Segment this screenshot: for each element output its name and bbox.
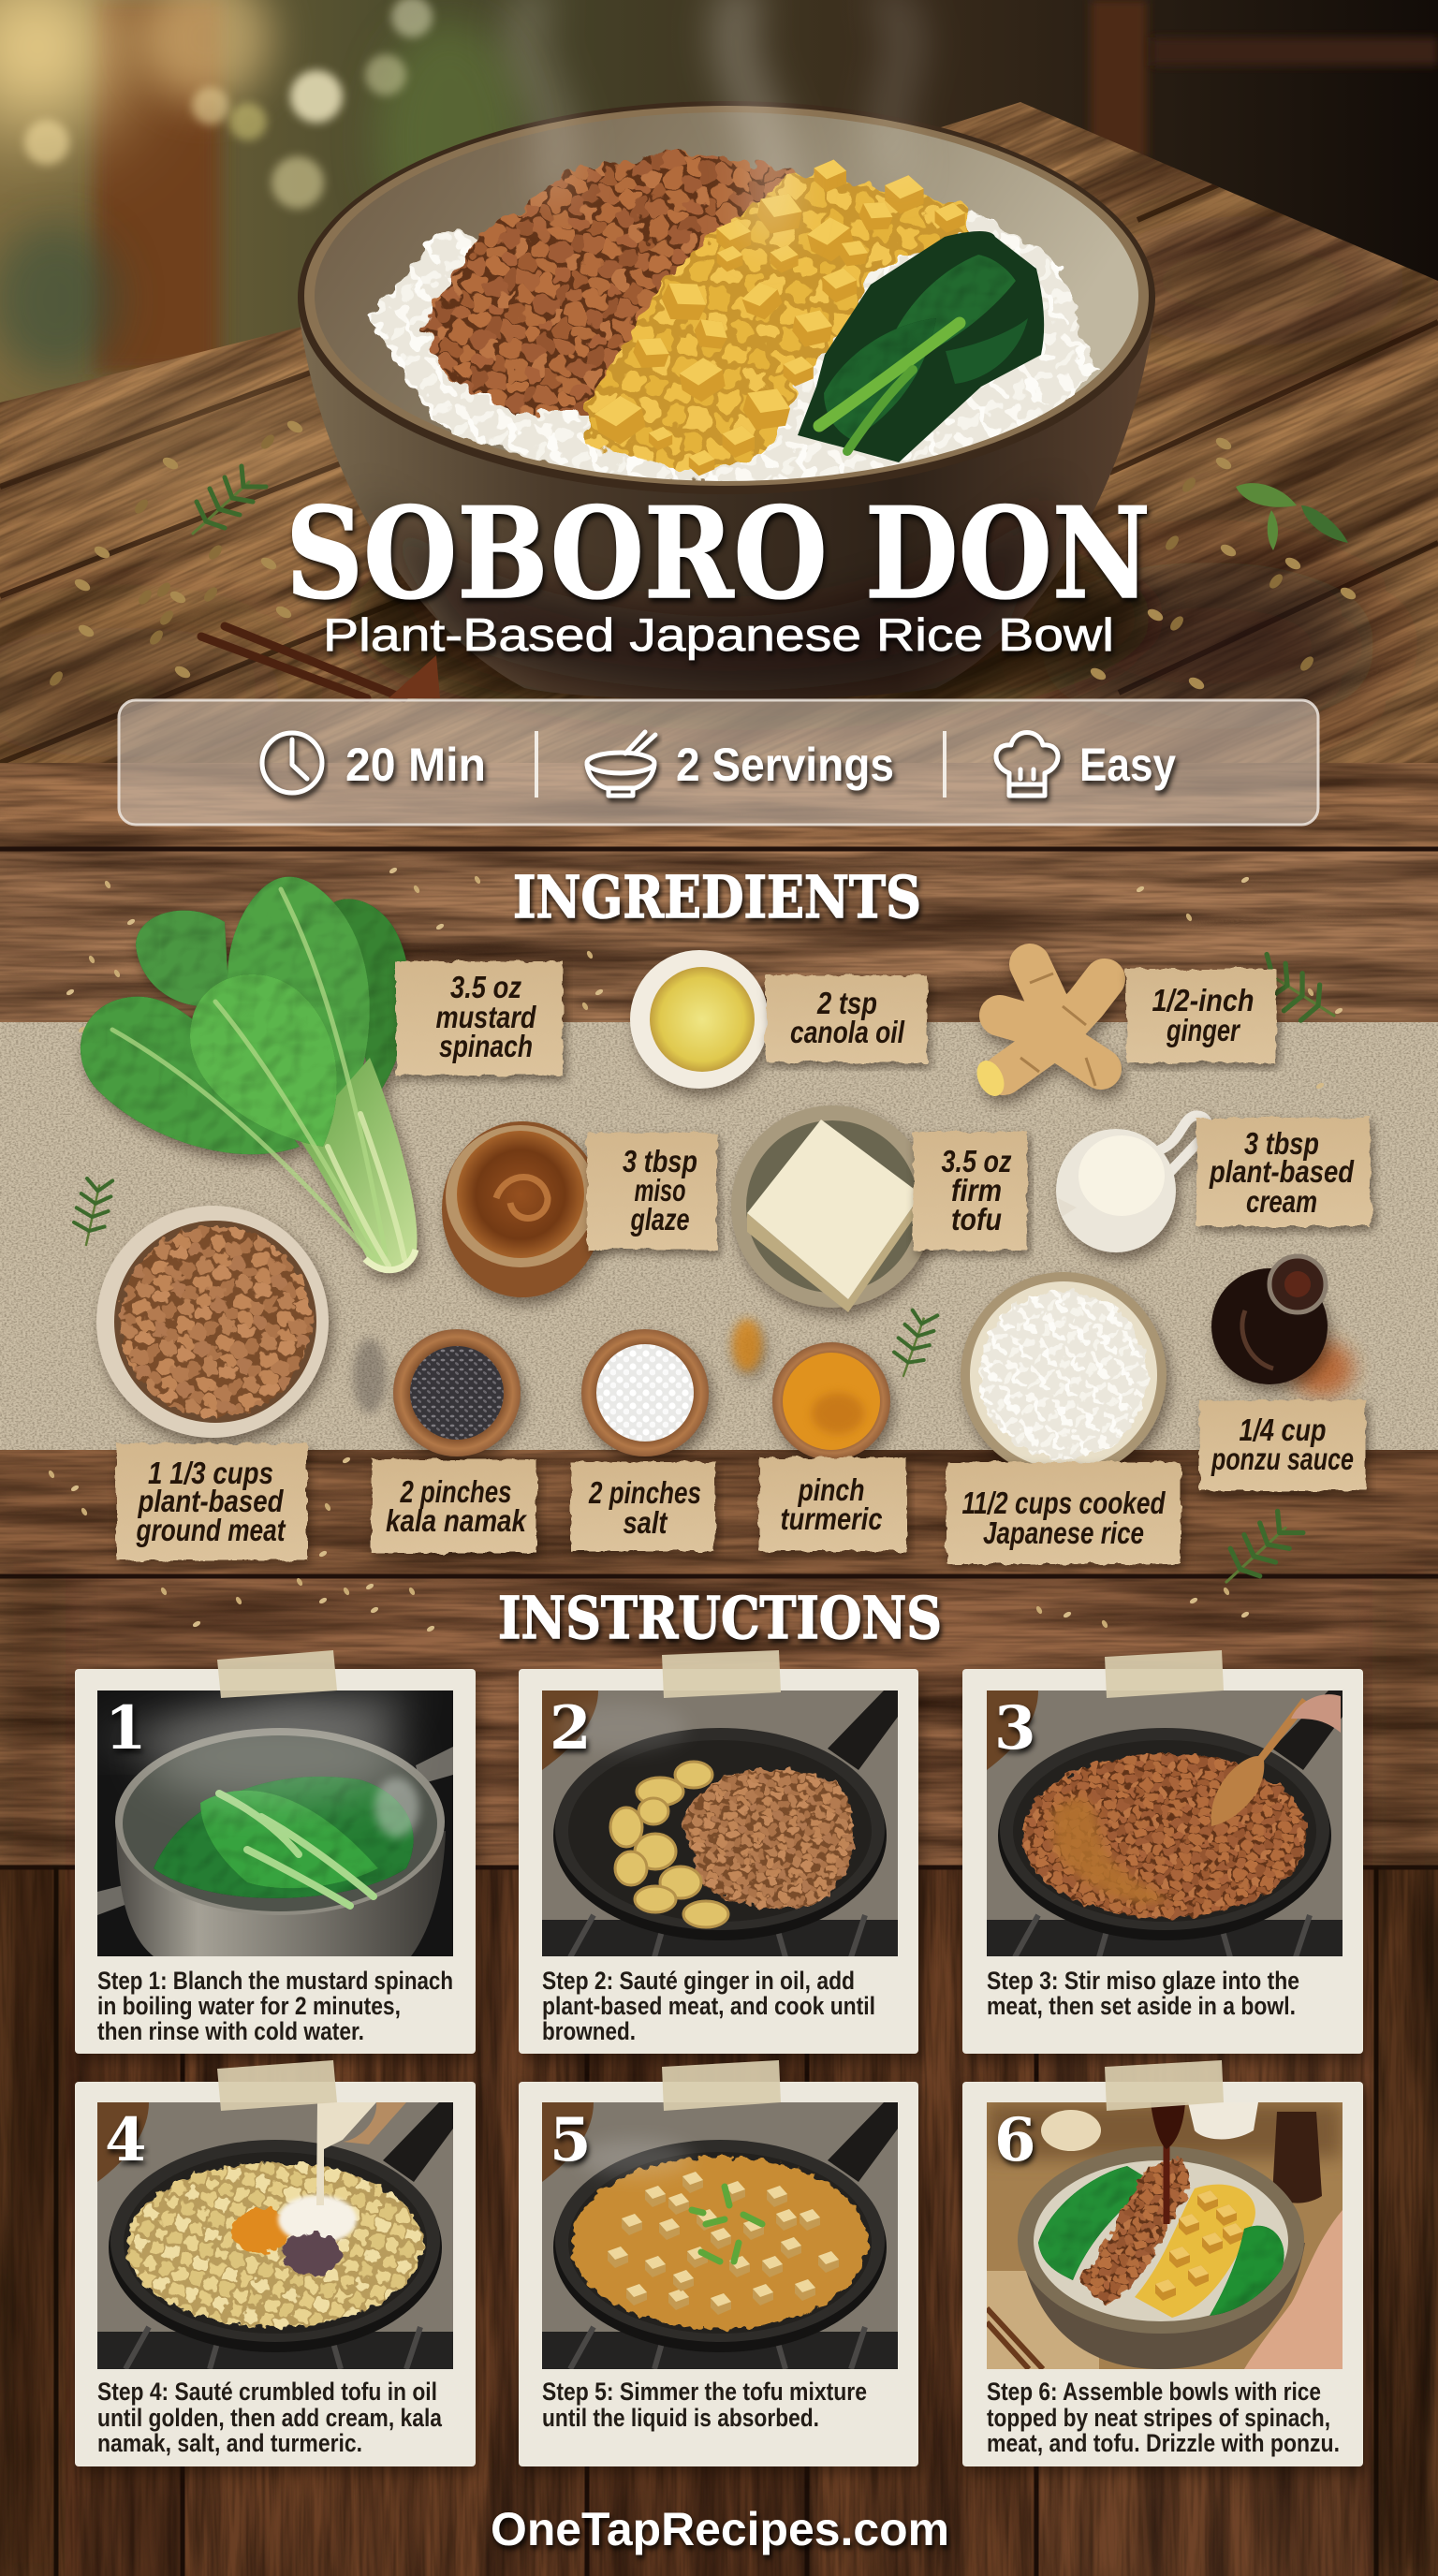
step 5 text: Step 5: Simmer the tofu mixture xyxy=(542,2378,867,2406)
tape xyxy=(662,1650,781,1698)
label: ponzu sauce: 1/4 cup xyxy=(1240,1412,1326,1447)
icon: mustard spinach bunch xyxy=(81,877,418,1270)
label: turmeric xyxy=(759,1457,906,1551)
step number 5: 5 xyxy=(550,2105,592,2175)
tape xyxy=(217,1650,337,1698)
icon: turmeric bowl xyxy=(732,1319,890,1460)
label: salt: 2 pinches xyxy=(588,1475,701,1510)
label: mustard spinach: mustard xyxy=(436,1000,536,1034)
step number 6: 6 xyxy=(994,2105,1036,2175)
label: mustard spinach: spinach xyxy=(439,1029,533,1063)
label: mustard spinach xyxy=(396,961,563,1076)
label: kala namak: 2 pinches xyxy=(400,1474,511,1509)
label: firm tofu: 3.5 oz xyxy=(942,1144,1012,1178)
scattered seeds and herbs xyxy=(47,418,1357,692)
divider xyxy=(943,731,946,798)
icon: rice bowl xyxy=(587,732,655,796)
label: miso glaze xyxy=(587,1133,717,1250)
subtitle: Plant-Based Japanese Rice Bowl xyxy=(323,610,1114,661)
label: firm tofu: tofu xyxy=(951,1202,1002,1237)
step 3 text: Step 3: Stir miso glaze into the xyxy=(987,1967,1299,1995)
label: plant-based ground meat: 1 1/3 cups xyxy=(148,1456,273,1490)
label: plant-based ground meat: plant-based xyxy=(138,1484,284,1518)
step 6 text: topped by neat stripes of spinach, xyxy=(987,2404,1330,2432)
wooden table xyxy=(0,102,1438,763)
icon: cream jug xyxy=(1056,1116,1208,1252)
servings: 2 Servings xyxy=(676,739,894,791)
step number 2: 2 xyxy=(550,1693,592,1764)
step 1 photo: pot of spinach xyxy=(97,1690,453,1956)
label: turmeric: pinch xyxy=(798,1472,865,1507)
tape xyxy=(217,2060,337,2111)
step 1 text: in boiling water for 2 minutes, xyxy=(97,1992,401,2020)
label: ginger xyxy=(1126,969,1276,1062)
icon: clock xyxy=(262,733,322,793)
label: cooked Japanese rice: 11/2 cups cooked xyxy=(962,1486,1166,1520)
icon: kala namak bowl xyxy=(393,1329,521,1456)
step card 2 xyxy=(519,1650,918,2054)
step card 4 xyxy=(75,2060,476,2466)
step number 1: 1 xyxy=(105,1693,147,1764)
rice layer xyxy=(370,211,1095,487)
label: plant-based ground meat: ground meat xyxy=(136,1513,286,1547)
step 6 text: Step 6: Assemble bowls with rice xyxy=(987,2378,1321,2406)
stats bar xyxy=(119,700,1318,825)
scattered seeds xyxy=(48,867,1343,1632)
label: plant-based cream: plant-based xyxy=(1209,1154,1355,1189)
label: ginger: ginger xyxy=(1166,1013,1241,1047)
frosted glass panel xyxy=(119,700,1318,825)
instructions heading: INSTRUCTIONS xyxy=(498,1584,942,1652)
step number 3: 3 xyxy=(994,1693,1036,1764)
step 4 text: until golden, then add cream, kala xyxy=(97,2404,443,2432)
step 5 text xyxy=(542,2378,867,2432)
label: cooked Japanese rice xyxy=(946,1462,1181,1564)
blurred garden background xyxy=(0,0,1438,449)
icon: ground meat bowl xyxy=(96,1206,329,1438)
steam xyxy=(524,0,905,225)
label: plant-based cream: cream xyxy=(1246,1184,1317,1219)
label: firm tofu: firm xyxy=(951,1173,1002,1208)
step card 6 xyxy=(962,2060,1363,2466)
step 2 text xyxy=(542,1967,875,2045)
donburi bowl xyxy=(298,101,1155,730)
label: ginger: 1/2-inch xyxy=(1152,983,1255,1017)
divider xyxy=(535,731,538,798)
instructions section xyxy=(75,1584,1363,2466)
label: salt: salt xyxy=(624,1505,668,1540)
footer website: OneTapRecipes.com xyxy=(491,2503,949,2555)
label: canola oil: canola oil xyxy=(790,1015,905,1049)
icon: ponzu bottle xyxy=(1211,1256,1354,1397)
tape xyxy=(1105,1650,1224,1698)
label: kala namak: kala namak xyxy=(386,1503,527,1538)
step 4 text: Step 4: Sauté crumbled tofu in oil xyxy=(97,2378,437,2406)
label: firm tofu xyxy=(913,1132,1027,1251)
step number 4: 4 xyxy=(105,2105,147,2175)
step 2 text: Step 2: Sauté ginger in oil, add xyxy=(542,1967,855,1995)
step 5 text: until the liquid is absorbed. xyxy=(542,2404,819,2432)
linen runner xyxy=(0,1022,1438,1450)
step 2 text: plant-based meat, and cook until xyxy=(542,1992,875,2020)
step 6 text xyxy=(987,2378,1340,2457)
title: SOBORO DON xyxy=(286,479,1151,627)
spinach xyxy=(798,231,1044,462)
step 1 text: Step 1: Blanch the mustard spinach xyxy=(97,1967,453,1995)
step card 3 xyxy=(962,1650,1363,2054)
step 4 photo: tofu with cream and spices xyxy=(97,2102,453,2369)
label: salt xyxy=(571,1462,715,1551)
icon: ginger root xyxy=(972,964,1105,1101)
step card 5 xyxy=(519,2060,918,2466)
icon: canola oil dish xyxy=(630,950,769,1089)
label: miso glaze: miso xyxy=(635,1173,685,1208)
step 3 text: meat, then set aside in a bowl. xyxy=(987,1992,1296,2020)
step 3 photo: miso glaze stirred into meat xyxy=(987,1690,1343,1957)
icon: salt bowl xyxy=(581,1329,709,1456)
step 4 text xyxy=(97,2378,443,2457)
ingredients section xyxy=(0,863,1438,1632)
difficulty: Easy xyxy=(1079,739,1176,791)
step 4 text: namak, salt, and turmeric. xyxy=(97,2429,362,2457)
label: canola oil xyxy=(766,975,928,1062)
prep time: 20 Min xyxy=(345,739,486,791)
label: turmeric: turmeric xyxy=(781,1501,882,1536)
icon: cooked rice bowl xyxy=(961,1272,1167,1478)
plant-based meat xyxy=(421,151,798,414)
label: plant-based ground meat xyxy=(116,1443,307,1560)
label: miso glaze: glaze xyxy=(630,1202,689,1237)
tape xyxy=(1105,2060,1224,2111)
label: kala namak xyxy=(372,1459,536,1553)
step 6 text: meat, and tofu. Drizzle with ponzu. xyxy=(987,2429,1340,2457)
step 3 text xyxy=(987,1967,1299,2020)
ingredients heading: INGREDIENTS xyxy=(513,863,921,931)
label: cooked Japanese rice: Japanese rice xyxy=(983,1515,1144,1550)
label: ponzu sauce xyxy=(1199,1400,1366,1491)
icon: firm tofu plate xyxy=(731,1105,933,1312)
icon: chef hat xyxy=(996,732,1058,796)
label: miso glaze: 3 tbsp xyxy=(623,1144,697,1178)
icon: miso glaze jar xyxy=(442,1121,603,1297)
step 1 text: then rinse with cold water. xyxy=(97,2017,364,2045)
step 6 photo: assembled bowl with ponzu drizzle xyxy=(987,2102,1343,2369)
lower wood board xyxy=(0,763,1438,2576)
label: ponzu sauce: ponzu sauce xyxy=(1211,1442,1354,1476)
label: plant-based cream: 3 tbsp xyxy=(1244,1126,1319,1161)
chopsticks xyxy=(201,626,440,698)
hero scene xyxy=(0,0,1438,763)
tape xyxy=(662,2060,781,2111)
label: mustard spinach: 3.5 oz xyxy=(450,970,521,1004)
label: plant-based cream xyxy=(1196,1118,1371,1226)
label: canola oil: 2 tsp xyxy=(816,986,877,1020)
step 5 photo: simmering tofu mixture xyxy=(542,2102,898,2369)
step 2 text: browned. xyxy=(542,2017,636,2045)
step 1 text xyxy=(97,1967,453,2045)
crumbled tofu xyxy=(587,159,972,476)
step 2 photo: ginger and meat in skillet xyxy=(542,1690,898,1956)
step card 1 xyxy=(75,1650,476,2054)
